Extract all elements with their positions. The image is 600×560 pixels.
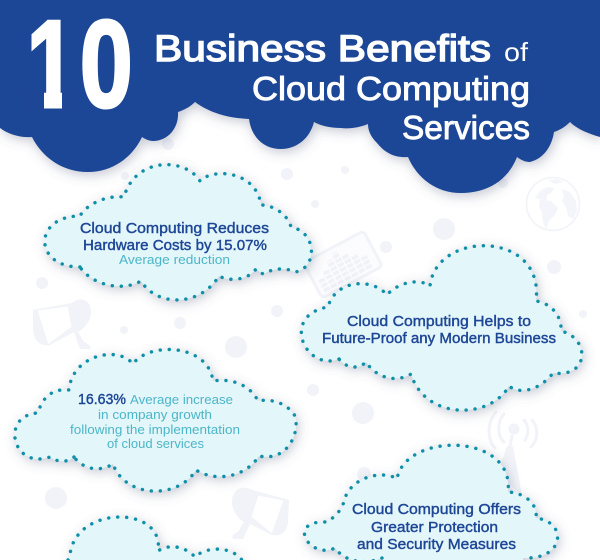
text: in company growth: in company growth (98, 408, 212, 422)
big number 10: 1 (26, 0, 76, 134)
heading: hardware costs: Cloud Computing Reduces (80, 221, 269, 237)
icon: bar chart tablet (303, 231, 382, 298)
background dots (36, 138, 587, 509)
cloud: bottom left, cropped (68, 517, 242, 560)
heading: future-proof: Future-Proof any Modern Business (322, 331, 556, 347)
icon: globe (526, 178, 580, 230)
cloud: hardware costs (45, 165, 311, 300)
heading: helps to: Cloud Computing Helps to (347, 314, 531, 330)
stat: 16.63%: 16.63% (78, 392, 126, 408)
icon: megaphone right (232, 488, 289, 539)
icon: megaphone left (33, 299, 91, 349)
cloud: future-proof (301, 246, 582, 410)
banner cloud shape (0, 0, 600, 193)
header banner (0, 0, 600, 193)
heading: greater protection: Greater Protection (371, 520, 498, 536)
title line: Business Benefits: Business Benefits (154, 28, 491, 69)
heading: security measures: and Security Measures (357, 537, 516, 553)
big number 10: 0 (80, 0, 133, 134)
heading: offers: Cloud Computing Offers (352, 502, 521, 518)
text: following the implementation: following the implementation (70, 423, 240, 437)
title line: Services: Services (402, 109, 530, 146)
caption: average reduction: Average reduction (119, 253, 230, 267)
title line: Cloud Computing: Cloud Computing (252, 70, 530, 107)
cloud: company growth (15, 349, 296, 491)
title word: of: of (504, 37, 529, 67)
icon: antenna tower (489, 412, 537, 495)
text: average increase: Average increase (130, 393, 233, 407)
cloud: security (304, 445, 558, 560)
big number 10 (26, 0, 133, 134)
heading: 15.07%: Hardware Costs by 15.07% (83, 238, 267, 254)
text: of cloud services: of cloud services (107, 437, 204, 451)
